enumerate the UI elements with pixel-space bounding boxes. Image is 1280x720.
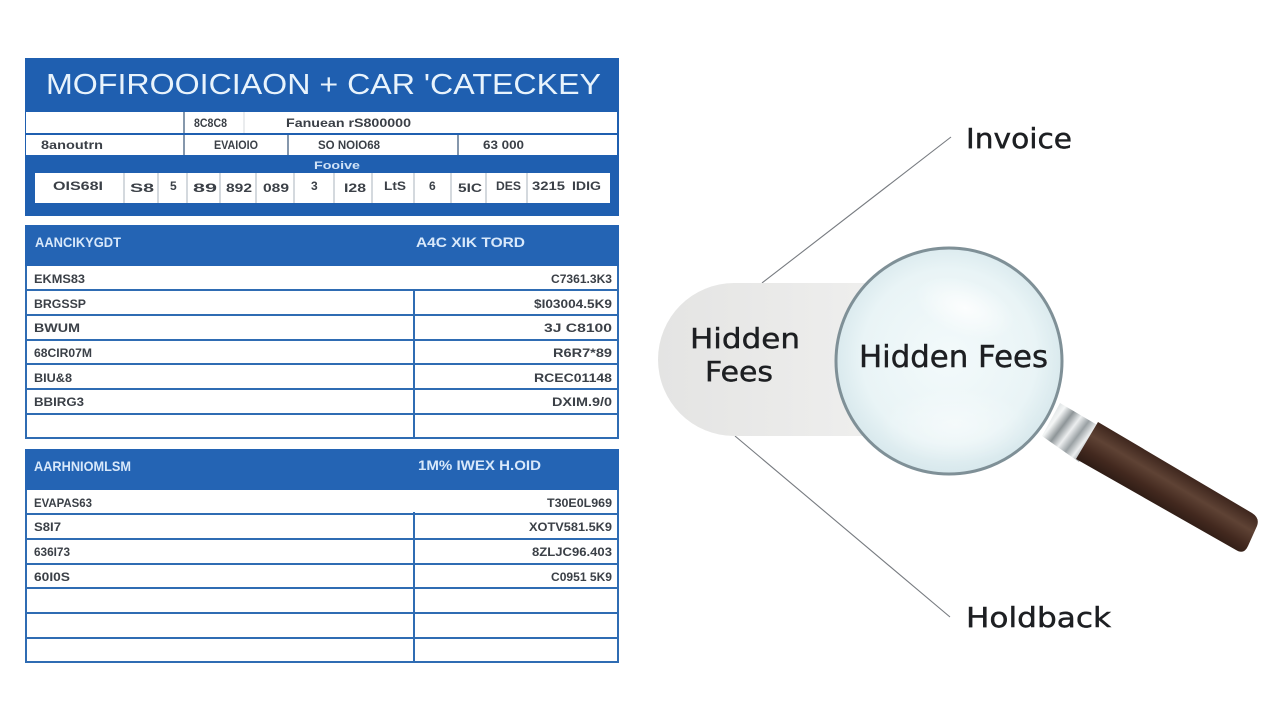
middle table rows: BWUM [34,321,80,335]
middle table rows [34,272,612,409]
info row two [26,135,617,155]
label: Holdback: Holdback [966,601,1112,634]
figures strip: 5 [170,179,177,193]
middle table rows: 68CIR07M [34,346,92,360]
figures strip: 892 [226,181,252,195]
info row two: EVAIOIO [214,138,258,152]
figures strip: 5IC [458,181,482,195]
figures strip [35,173,610,203]
connector line to Invoice [762,137,951,283]
title: MOFIROOICIAON + CAR 'CATECKEY [46,69,601,101]
lens text: Hidden Fees [859,340,1048,375]
figures strip: LtS [384,179,406,193]
info row one [26,112,617,133]
band label: Fooive [314,160,360,172]
figures strip: 3 [311,179,318,193]
middle table rows: BRGSSP [34,297,86,311]
lower table rows: C0951 5K9 [551,570,612,584]
figures strip: OIS68I [53,179,103,193]
middle table rows: BBIRG3 [34,395,84,409]
info row one: 8C8C8 [194,116,227,130]
lower table rows: XOTV581.5K9 [529,520,612,534]
lower table rows: 60I0S [34,570,70,584]
figures strip: IDIG [572,179,601,193]
middle table rows: R6R7*89 [553,346,612,360]
info row two: 8anoutrn [41,138,103,152]
lower table rows [34,496,612,584]
info row two: 63 000 [483,138,524,152]
middle table heading left: AANCIKYGDT [35,234,121,250]
middle table rows: DXIM.9/0 [552,395,612,409]
lower table rows: T30E0L969 [547,496,612,510]
label: Invoice: Invoice [966,122,1072,155]
middle table rows: 3J C8100 [544,321,612,335]
middle table rows: $I03004.5K9 [534,297,612,311]
magnifier handle [1076,422,1258,552]
info row one: Fanuean rS800000 [286,116,411,130]
figures strip: S8 [130,181,155,195]
magnifier ferrule [1042,403,1099,462]
magnifier lens [836,248,1062,474]
pill text [690,322,800,388]
lower table heading right: 1M% IWEX H.OID [418,457,541,473]
pill text: Fees [705,355,773,388]
pill text: Hidden [690,322,800,355]
panel: middle table [25,225,619,438]
info row two: SO NOIO68 [318,138,380,152]
middle table rows: RCEC01148 [534,371,612,385]
figures strip: 089 [263,181,289,195]
pill: hidden fees [658,283,880,436]
figures strip: I28 [344,181,366,195]
lower table heading left: AARHNIOMLSM [34,458,131,474]
icon: magnifying glass [836,248,1258,552]
middle table rows: EKMS83 [34,272,85,286]
middle table heading right: A4C XIK TORD [416,234,525,250]
connector line to Holdback [735,436,950,617]
lower table rows: EVAPAS63 [34,496,92,510]
lower table rows: S8I7 [34,520,61,534]
lower table rows: 636I73 [34,545,70,559]
panel: invoice header [25,58,619,216]
middle table rows: BIU&8 [34,371,72,385]
middle table rows: C7361.3K3 [551,272,612,286]
figures strip: 6 [429,179,436,193]
figures strip: 89 [193,181,218,195]
figures strip: 3215 [532,179,565,193]
panel: lower table [25,449,619,662]
lower table rows: 8ZLJC96.403 [532,545,612,559]
figures strip: DES [496,179,521,193]
